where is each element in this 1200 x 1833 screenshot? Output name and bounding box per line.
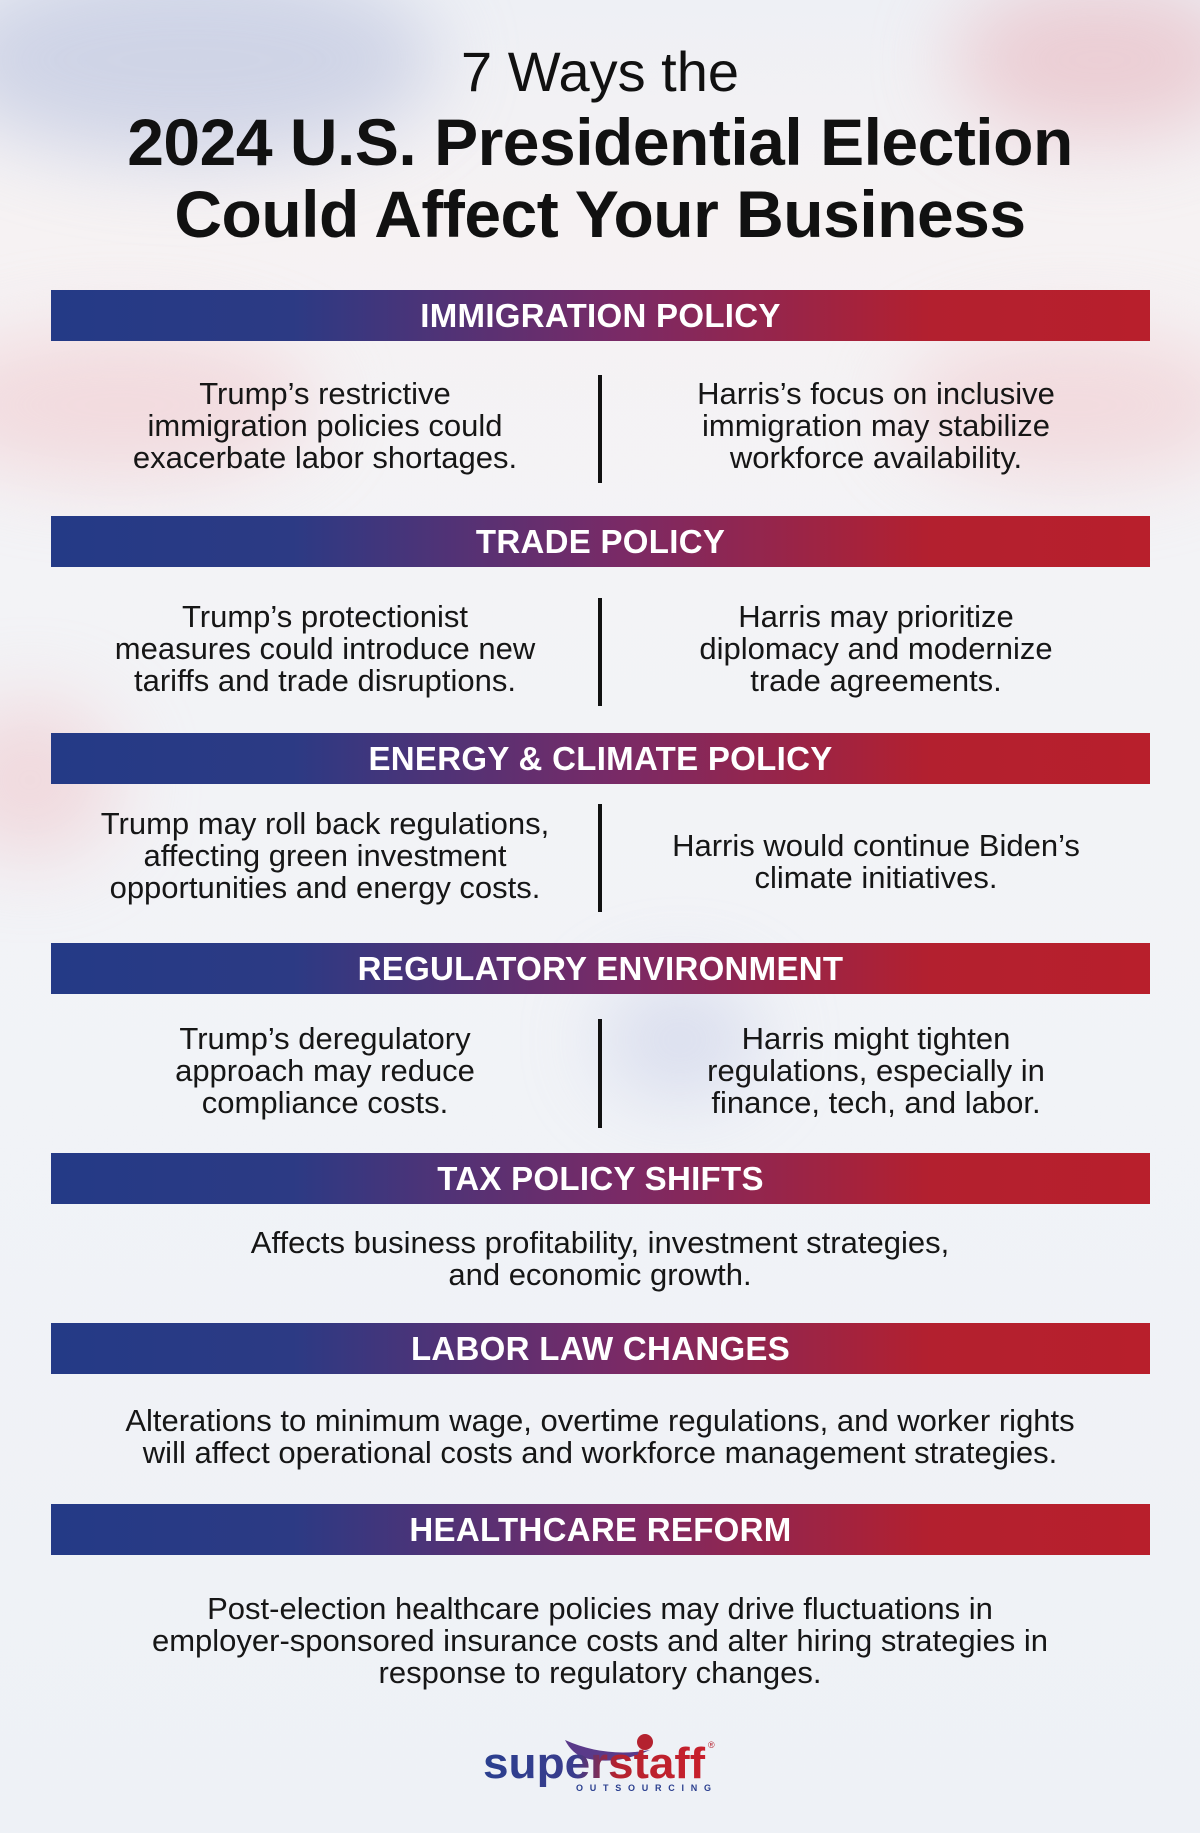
right text: Harris would continue Biden’s xyxy=(672,828,1080,863)
text: Alterations to minimum wage, overtime regulations, and worker rights xyxy=(125,1403,1075,1438)
left text: affecting green investment xyxy=(143,838,507,873)
section: healthcare xyxy=(51,1504,1150,1690)
text xyxy=(125,1403,1075,1470)
title: 2024 U.S. Presidential Election xyxy=(127,105,1073,179)
right text: Harris’s focus on inclusive xyxy=(697,376,1055,411)
left text xyxy=(175,1021,475,1120)
right text: finance, tech, and labor. xyxy=(711,1085,1041,1120)
bar heading xyxy=(51,290,1150,341)
title: Could Affect Your Business xyxy=(174,177,1026,251)
left text: Trump may roll back regulations, xyxy=(101,806,549,841)
text: Affects business profitability, investment strategies, xyxy=(251,1225,949,1260)
bar heading xyxy=(51,1323,1150,1374)
text xyxy=(250,1225,949,1292)
right text xyxy=(699,599,1053,698)
title: 7 Ways the xyxy=(461,40,739,103)
right text: trade agreements. xyxy=(750,663,1002,698)
bar heading xyxy=(51,733,1150,784)
left text xyxy=(101,806,549,905)
bar heading: HEALTHCARE REFORM xyxy=(409,1511,792,1548)
right text: workforce availability. xyxy=(730,440,1022,475)
left text: measures could introduce new xyxy=(115,631,535,666)
bar heading: REGULATORY ENVIRONMENT xyxy=(358,950,843,987)
left text xyxy=(133,376,517,475)
bar heading xyxy=(51,1153,1150,1204)
bar heading: TRADE POLICY xyxy=(476,523,725,560)
text: employer-sponsored insurance costs and alter hiring strategies in xyxy=(152,1623,1048,1658)
text: Post-election healthcare policies may drive fluctuations in xyxy=(207,1591,993,1626)
title xyxy=(127,40,1073,251)
logo: OUTSOURCING xyxy=(576,1783,711,1793)
text xyxy=(152,1591,1048,1690)
logo: ® xyxy=(708,1740,715,1750)
left text: approach may reduce xyxy=(175,1053,475,1088)
bar heading xyxy=(51,516,1150,567)
bar heading: LABOR LAW CHANGES xyxy=(411,1330,790,1367)
logo: superstaff xyxy=(483,1739,705,1788)
left text: tariffs and trade disruptions. xyxy=(134,663,516,698)
left text: Trump’s protectionist xyxy=(182,599,468,634)
right text xyxy=(707,1021,1045,1120)
text: response to regulatory changes. xyxy=(379,1655,821,1690)
text: will affect operational costs and workforce management strategies. xyxy=(143,1435,1057,1470)
left text: opportunities and energy costs. xyxy=(110,870,540,905)
bar heading: ENERGY & CLIMATE POLICY xyxy=(368,740,833,777)
section: tax xyxy=(51,1153,1150,1292)
section: trade policy xyxy=(51,516,1150,706)
section: regulatory xyxy=(51,943,1150,1128)
right text: Harris might tighten xyxy=(742,1021,1010,1056)
bar heading xyxy=(51,1504,1150,1555)
section: immigration policy xyxy=(51,290,1150,483)
left text xyxy=(115,599,536,698)
right text: immigration may stabilize xyxy=(702,408,1050,443)
left text: Trump’s deregulatory xyxy=(179,1021,471,1056)
left text: compliance costs. xyxy=(202,1085,448,1120)
left text: Trump’s restrictive xyxy=(199,376,451,411)
bar heading xyxy=(51,943,1150,994)
right text xyxy=(672,828,1080,895)
text: and economic growth. xyxy=(448,1257,752,1292)
section: energy xyxy=(51,733,1150,912)
right text xyxy=(697,376,1055,475)
section: labor xyxy=(51,1323,1150,1470)
right text: diplomacy and modernize xyxy=(699,631,1053,666)
bar heading: TAX POLICY SHIFTS xyxy=(437,1160,764,1197)
left text: immigration policies could xyxy=(148,408,502,443)
right text: regulations, especially in xyxy=(707,1053,1045,1088)
right text: climate initiatives. xyxy=(755,860,997,895)
bar heading: IMMIGRATION POLICY xyxy=(420,297,781,334)
left text: exacerbate labor shortages. xyxy=(133,440,517,475)
right text: Harris may prioritize xyxy=(738,599,1014,634)
